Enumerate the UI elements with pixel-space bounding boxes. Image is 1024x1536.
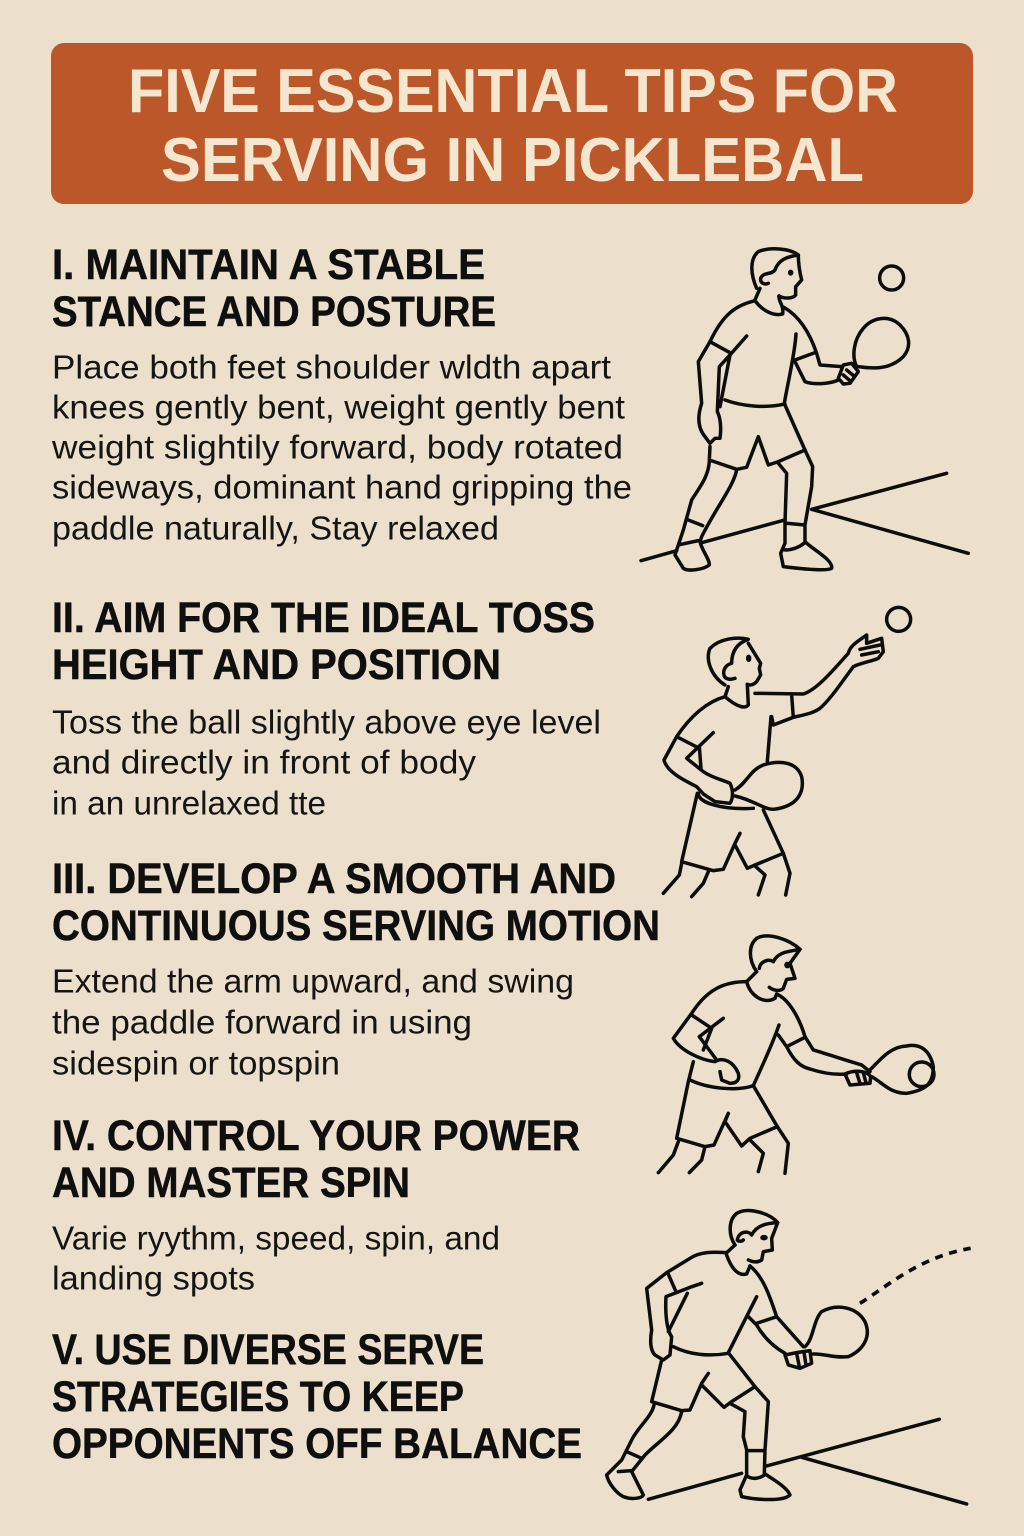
heading: tip V: V. USE DIVERSE SERVE [52, 1326, 484, 1374]
heading: tip IV [52, 1112, 580, 1207]
heading: tip V [52, 1326, 582, 1468]
heading: tip III: III. DEVELOP A SMOOTH AND [52, 855, 616, 903]
text: tip III body: the paddle forward in using [52, 1004, 472, 1040]
heading: tip IV: IV. CONTROL YOUR POWER [52, 1112, 580, 1160]
heading: tip I [52, 241, 496, 336]
illustration: player following through with dashed ball path and court lines [607, 1211, 971, 1504]
text: tip IV body: Varie ryythm, speed, spin, and [52, 1220, 500, 1256]
text: tip I body: knees gently bent, weight gently bent [52, 388, 625, 426]
text: tip I body: paddle naturally, Stay relaxed [52, 510, 499, 546]
text: tip I body: sideways, dominant hand gripping the [52, 468, 632, 506]
text: tip I body: Place both feet shoulder wldth apart [52, 348, 611, 386]
illustration: player ready stance with ball and court lines [641, 249, 968, 570]
heading: tip I: I. MAINTAIN A STABLE [52, 241, 485, 289]
text: tip III body [52, 962, 574, 1082]
title banner [51, 43, 973, 204]
text: tip III body: Extend the arm upward, and swing [52, 962, 574, 1000]
text: tip II body: Toss the ball slightly above eye level [52, 704, 601, 740]
heading: tip IV: AND MASTER SPIN [52, 1159, 410, 1207]
illustration: player swinging paddle at ball [658, 936, 934, 1173]
text: tip II body: in an unrelaxed tte [52, 784, 326, 822]
illustration: player tossing ball [663, 607, 911, 897]
heading: tip III: CONTINUOUS SERVING MOTION [52, 902, 660, 950]
title banner: FIVE ESSENTIAL TIPS FOR [128, 57, 898, 126]
text: tip I body [51, 348, 632, 546]
text: tip IV body: landing spots [52, 1260, 255, 1296]
heading: tip III [52, 855, 660, 950]
heading: tip II [52, 594, 595, 689]
text: tip II body: and directly in front of body [52, 744, 477, 780]
text: tip IV body [52, 1220, 500, 1296]
heading: tip II: II. AIM FOR THE IDEAL TOSS [52, 594, 595, 642]
heading: tip I: STANCE AND POSTURE [52, 288, 496, 336]
heading: tip V: STRATEGIES TO KEEP [52, 1373, 464, 1421]
text: tip III body: sidespin or topspin [52, 1044, 340, 1082]
heading: tip V: OPPONENTS OFF BALANCE [52, 1420, 582, 1468]
text: tip II body [52, 704, 601, 822]
title banner: SERVING IN PICKLEBAL [161, 126, 864, 195]
heading: tip II: HEIGHT AND POSITION [52, 641, 501, 689]
text: tip I body: weight slightily forward, body rotated [51, 428, 623, 466]
